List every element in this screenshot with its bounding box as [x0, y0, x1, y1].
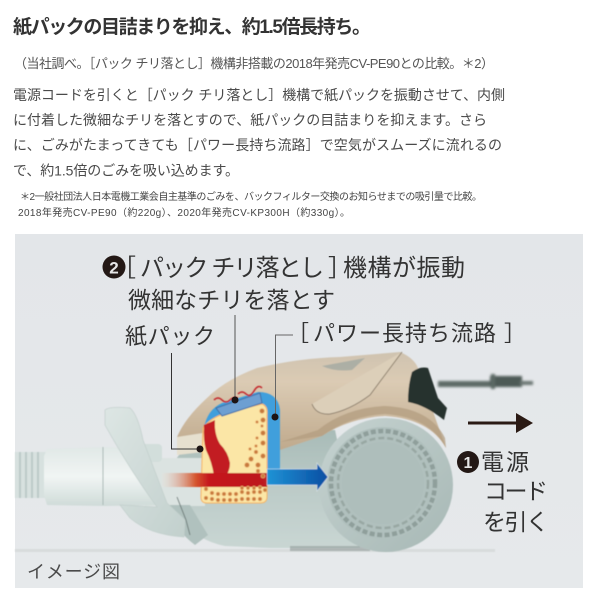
title: 紙パックの目詰まりを抑え、約1.5倍長持ち。 [13, 15, 371, 38]
body text: に付着した微細なチリを落とすので、紙パックの目詰まりを抑えます。さら [13, 112, 487, 128]
blue air channel [204, 392, 280, 478]
cross-section [162, 387, 328, 503]
red airflow horizontal [162, 473, 267, 487]
label: step 1 pull cord [457, 449, 549, 535]
red airflow into bag [204, 420, 230, 478]
hood lid line [312, 352, 402, 414]
body shadow on floor [290, 546, 370, 551]
leader: paper bag [172, 353, 204, 452]
label: step 2 mechanism: 機構が振動 [343, 255, 465, 282]
footnote [18, 190, 482, 219]
hood dark band around wheel [280, 406, 446, 448]
label: step 1 pull cord: コード [484, 478, 548, 504]
label: step 2 mechanism: ］ [328, 255, 352, 282]
floor shadow [15, 549, 495, 552]
dark cord outlet [408, 368, 447, 420]
arrow: pull direction [468, 413, 533, 433]
note: comparison condition: （当社調べ。［パック チリ落とし］機構非搭載の2018年発売CV-PE90との比較。＊2） [14, 56, 494, 71]
footnote: 2018年発売CV-PE90（約220g）、2020年発売CV-KP300H（約330g）。 [18, 206, 350, 219]
body text: に、ごみがたまってきても［パワー長持ち流路］で空気がスムーズに流れるの [13, 137, 502, 153]
label: power flow path: ［ [287, 321, 309, 346]
label: step 2 mechanism [102, 255, 465, 313]
label: step 2 mechanism: パック チリ落とし [140, 255, 324, 282]
label: step 2 mechanism: 微細なチリを落とす [128, 287, 335, 313]
hood pale front band [177, 433, 203, 455]
vibration waves [214, 387, 262, 402]
hose ribs [15, 452, 46, 498]
body text [13, 87, 505, 178]
dust particles [204, 408, 267, 502]
filter [216, 393, 262, 416]
nozzle joint line [177, 497, 190, 535]
power cord [438, 374, 533, 389]
paper bag [201, 404, 267, 503]
label: power flow path: パワー長持ち流路 [313, 321, 496, 346]
hose cuff [44, 447, 160, 506]
nozzle crescent [105, 407, 185, 537]
vacuum lower body [168, 430, 360, 548]
label: image illustration note: イメージ図 [27, 562, 120, 582]
wheel [319, 418, 453, 552]
body text: で、約1.5倍のごみを吸い込めます。 [13, 162, 239, 178]
label: step 1 pull cord: を引く [483, 509, 549, 535]
label: step 2 mechanism: ［ [112, 255, 136, 282]
top control strip [322, 358, 365, 370]
blue outlet arrow [267, 463, 328, 491]
label: step 2 mechanism: 2 [109, 258, 119, 278]
label: power flow path: ］ [504, 321, 526, 346]
leader: power flow path [272, 335, 293, 420]
connector pipe [145, 458, 205, 506]
leader: pack dust mechanism [232, 315, 238, 404]
vacuum beige hood [177, 352, 446, 451]
label: paper bag: 紙パック [125, 324, 215, 349]
footnote: ＊2一般社団法人日本電機工業会自主基準のごみを、バックフィルター交換のお知らせまでの吸引量で比較。 [20, 190, 482, 203]
panel: diagram background [15, 234, 583, 588]
label: step 1 pull cord: 電源 [481, 449, 529, 475]
body text: 電源コードを引くと［パック チリ落とし］機構で紙パックを振動させて、内側 [13, 87, 505, 103]
illustration: vacuum cleaner [15, 352, 453, 552]
label: step 1 pull cord: 1 [464, 455, 473, 472]
